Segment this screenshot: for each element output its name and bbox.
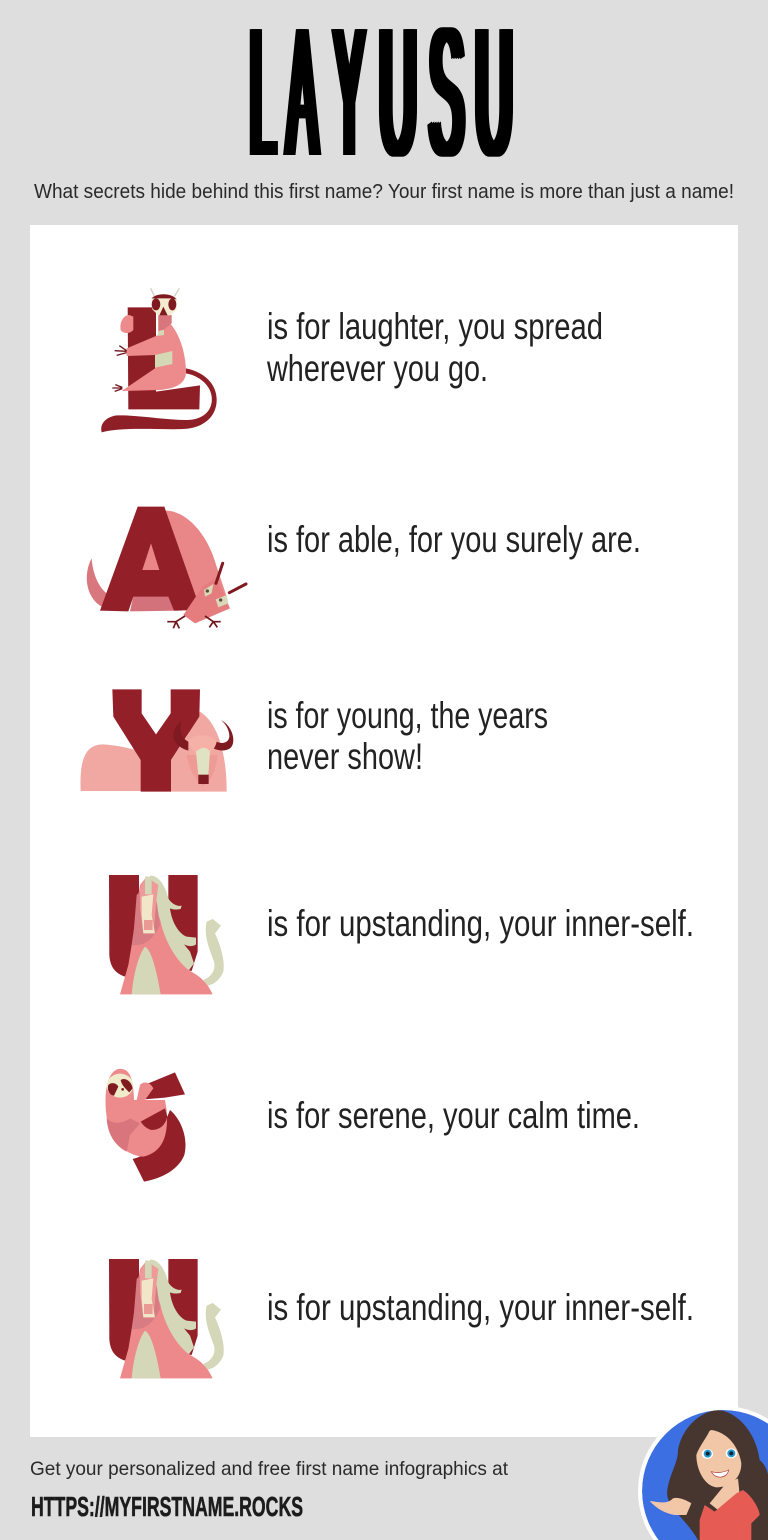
text: Y line: is for young, the years	[267, 695, 548, 736]
title	[246, 0, 513, 194]
row: Y	[80, 689, 548, 792]
row: U second	[109, 1259, 694, 1378]
text: A line: is for able, for you surely are.	[267, 519, 641, 560]
row: S	[106, 1069, 640, 1182]
icon: L lemur	[101, 288, 217, 432]
icon: Y yak	[80, 689, 233, 792]
text: L line: is for laughter, you spread	[267, 306, 603, 347]
row: U	[109, 875, 694, 994]
text: Y line: never show!	[267, 736, 423, 777]
icon: S sloth	[106, 1069, 185, 1182]
row: L	[101, 288, 603, 432]
footer url: HTTPS://MYFIRSTNAME.ROCKS	[31, 1491, 303, 1522]
subtitle: What secrets hide behind this first name? Your first name is more than just a name!	[34, 181, 734, 203]
footer text: Get your personalized and free first name infographics at	[30, 1458, 509, 1480]
row: A	[87, 507, 641, 628]
icon: U horse	[109, 875, 224, 994]
text: Y line	[267, 695, 548, 777]
avatar	[638, 1406, 768, 1540]
text: L line: wherever you go.	[266, 348, 488, 389]
icon: A armadillo	[87, 507, 246, 628]
text: L line	[266, 306, 603, 389]
icon: U horse second	[109, 1259, 224, 1378]
panel: letters	[30, 225, 738, 1437]
text: S line: is for serene, your calm time.	[267, 1095, 640, 1136]
